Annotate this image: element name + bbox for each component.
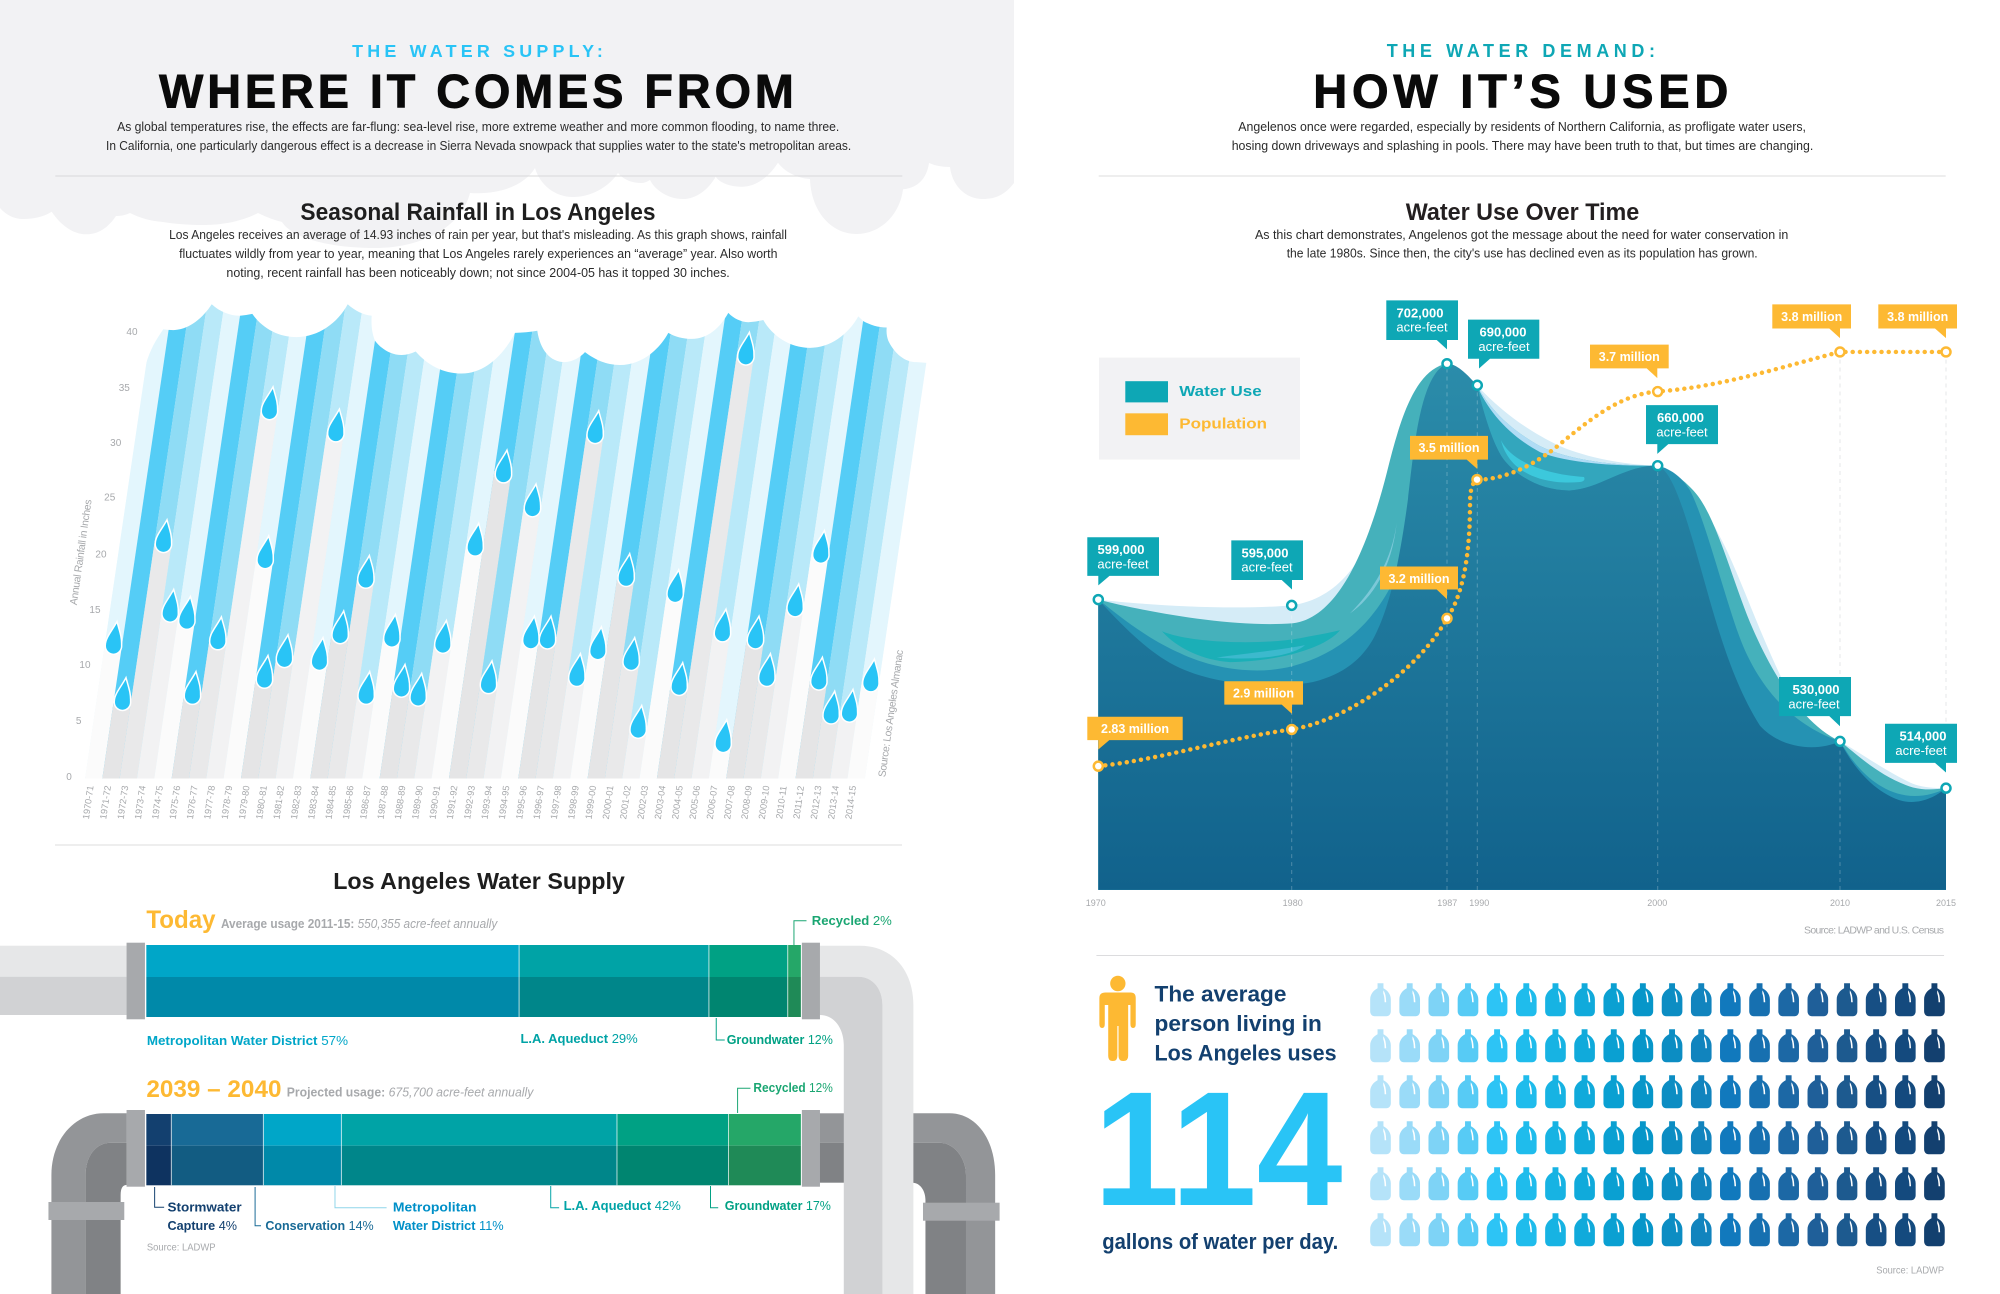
rainfall x axis year labels: 2006-07 xyxy=(705,785,720,820)
callout: 3.7 million: 3.7 million xyxy=(1599,350,1660,364)
callout: 702,000 acre-feet xyxy=(1386,300,1458,349)
chart x axis years: 1987 xyxy=(1437,898,1457,908)
rainfall x axis year labels: 1989-90 xyxy=(410,785,425,820)
callout: 2.9 million xyxy=(1224,681,1303,714)
pipes: dark gray projected pipe xyxy=(48,1113,1000,1294)
projected label: stormwater capture xyxy=(155,1187,242,1233)
supply intro paragraph xyxy=(106,119,851,153)
rainfall y axis values: 10 xyxy=(79,660,91,671)
projected label: aqueduct: L.A. Aqueduct 42% xyxy=(564,1199,681,1213)
callout: 599,000 acre-feet xyxy=(1087,537,1159,585)
legend panel: Population xyxy=(1179,417,1267,433)
chart x axis years: 2000 xyxy=(1647,898,1667,908)
rainfall x axis year labels: 2010-11 xyxy=(774,785,789,820)
callout: 690,000 acre-feet: acre-feet xyxy=(1478,339,1530,354)
rainfall x axis year labels: 1980-81 xyxy=(254,785,269,820)
demand intro paragraph: Angelenos once were regarded, especially by residents of Northern California, as profligate water users, xyxy=(1238,119,1806,134)
rainfall x axis year labels: 1992-93 xyxy=(462,785,477,820)
callout: 3.8 million 2015: 3.8 million xyxy=(1887,310,1948,324)
projected label: metropolitan water district xyxy=(335,1186,504,1233)
callout: 3.7 million xyxy=(1590,345,1669,378)
rainfall x axis year labels: 1995-96 xyxy=(514,785,529,820)
rainfall x axis year labels: 2005-06 xyxy=(688,785,702,820)
callout: 595,000 acre-feet xyxy=(1231,540,1303,589)
rainfall x axis year labels: 1996-97 xyxy=(532,785,546,820)
rainfall description xyxy=(169,227,787,280)
water use description: the late 1980s. Since then, the city's use has declined even as its population has grown. xyxy=(1287,246,1758,261)
callout: 660,000 acre-feet: acre-feet xyxy=(1656,424,1708,439)
projected label: groundwater xyxy=(711,1186,831,1213)
rainfall x axis year labels: 2014-15 xyxy=(843,785,858,820)
chart x axis years: 1990 xyxy=(1469,898,1489,908)
rainfall x axis year labels: 2007-08 xyxy=(722,785,737,820)
projected label: conservation: Conservation 14% xyxy=(265,1219,374,1233)
rain drop markers xyxy=(105,332,879,753)
gallons source: Source: LADWP xyxy=(1876,1265,1944,1277)
callout: 530,000 acre-feet: 530,000 xyxy=(1793,682,1839,697)
rainfall x axis year labels: 1990-91 xyxy=(428,785,442,820)
rainfall y axis title: Annual Rainfall in Inches xyxy=(69,499,95,606)
demand intro paragraph xyxy=(1232,119,1813,153)
rainfall x axis year labels: 2008-09 xyxy=(739,785,754,820)
projected label: aqueduct xyxy=(551,1186,681,1213)
callout: 2.9 million: 2.9 million xyxy=(1233,687,1294,701)
water use heading: Water Use Over Time xyxy=(1406,199,1639,226)
rainfall x axis year labels: 1983-84 xyxy=(306,785,321,820)
rainfall y axis values: 15 xyxy=(89,605,101,616)
population dotted line xyxy=(1098,352,1946,766)
rainfall y axis values: 40 xyxy=(126,327,138,338)
chart x axis years: 2015 xyxy=(1936,898,1956,908)
per-person text intro: Los Angeles uses xyxy=(1155,1041,1337,1066)
projected label: groundwater: Groundwater 17% xyxy=(725,1199,831,1213)
rainfall x axis year labels: 1970-71 xyxy=(81,785,96,820)
rainfall x axis year labels: 1998-99 xyxy=(566,785,581,820)
callout: 690,000 acre-feet: 690,000 xyxy=(1480,325,1526,340)
per-person text intro: person living in xyxy=(1155,1011,1322,1036)
projected label: stormwater capture: Stormwater xyxy=(167,1201,242,1215)
water use markers xyxy=(1094,359,1950,793)
callout: 3.2 million: 3.2 million xyxy=(1388,572,1450,586)
rainfall x axis year labels: 2003-04 xyxy=(653,785,668,820)
rainfall x axis year labels: 1978-79 xyxy=(220,785,234,820)
chart x axis years: 2010 xyxy=(1830,898,1850,908)
population markers xyxy=(1094,347,1950,771)
rainfall y axis values: 20 xyxy=(95,550,107,561)
today label: metropolitan water district: Metropolitan Water District 57% xyxy=(147,1034,348,1048)
rainfall x axis year labels: 2002-03 xyxy=(636,785,650,820)
callout: 595,000 acre-feet: acre-feet xyxy=(1241,560,1293,575)
callout: 3.5 million: 3.5 million xyxy=(1418,441,1480,455)
rainfall x axis year labels: 2009-10 xyxy=(757,785,772,820)
icon: person xyxy=(1099,976,1136,1061)
rainfall y axis values xyxy=(66,327,138,783)
rainfall x axis year labels: 1972-73 xyxy=(116,785,130,820)
rainfall x axis year labels xyxy=(81,785,858,820)
callout: 530,000 acre-feet: acre-feet xyxy=(1788,696,1840,711)
per-person usage panel xyxy=(1094,955,1945,1277)
demand eyebrow heading: THE WATER DEMAND: xyxy=(1387,41,1655,61)
rainfall x axis year labels: 1994-95 xyxy=(497,785,512,820)
rainfall y axis values: 25 xyxy=(104,492,116,503)
rainfall x axis year labels: 1975-76 xyxy=(168,785,182,820)
per-person text intro: The average xyxy=(1155,982,1286,1007)
rainfall bar chart xyxy=(85,304,926,778)
background cloud: supply header xyxy=(0,0,1014,248)
rainfall x axis year labels: 1991-92 xyxy=(445,785,460,820)
water supply panel xyxy=(0,868,1000,1294)
rainfall x axis year labels: 1984-85 xyxy=(324,785,338,820)
gallon jugs pictogram xyxy=(1370,983,1945,1246)
rainfall x axis year labels: 1974-75 xyxy=(150,785,165,820)
supply eyebrow heading: THE WATER SUPPLY: xyxy=(352,41,603,61)
callout: 530,000 acre-feet xyxy=(1779,677,1851,726)
rainfall x axis year labels: 1981-82 xyxy=(272,785,286,820)
legend panel: Water Use xyxy=(1179,384,1262,400)
rainfall y axis values: 0 xyxy=(66,772,72,783)
callout: 2.83 million: 2.83 million xyxy=(1101,722,1169,736)
rainfall description: noting, recent rainfall has been noticeably down; not since 2004-05 has it topped 30 inches. xyxy=(226,265,730,280)
callout: 514,000 acre-feet xyxy=(1885,724,1957,773)
rainfall description: Los Angeles receives an average of 14.93 inches of rain per year, but that's misleading. As this graph shows, rainfall xyxy=(169,227,787,242)
water use area chart xyxy=(1098,364,1946,890)
callout: 660,000 acre-feet: 660,000 xyxy=(1657,410,1704,425)
projected label: stormwater capture: Capture 4% xyxy=(167,1219,237,1233)
projected stacked bar xyxy=(146,1114,801,1185)
chart x axis years xyxy=(1086,898,1956,908)
rainfall x axis year labels: 1985-86 xyxy=(341,785,356,820)
callout: 514,000 acre-feet: 514,000 xyxy=(1900,729,1946,744)
callout: 599,000 acre-feet: acre-feet xyxy=(1097,557,1149,572)
rainfall x axis year labels: 1979-80 xyxy=(237,785,252,820)
rainfall x axis year labels: 1986-87 xyxy=(358,785,373,820)
water use description xyxy=(1255,227,1788,261)
callout: 3.5 million xyxy=(1410,436,1488,469)
today stacked bar xyxy=(146,945,801,1017)
rainfall y axis values: 35 xyxy=(119,383,130,394)
rainfall x axis year labels: 1973-74 xyxy=(133,785,148,820)
chart year guide lines xyxy=(1292,352,1946,890)
projected flanges xyxy=(127,1110,820,1187)
legend panel xyxy=(1099,358,1300,460)
rainfall x axis year labels: 2013-14 xyxy=(826,785,841,820)
callout: 3.8 million 2010: 3.8 million xyxy=(1781,310,1842,324)
rainfall x axis year labels: 1977-78 xyxy=(202,785,217,820)
water supply source: Source: LADWP xyxy=(147,1243,216,1254)
today heading: Today xyxy=(146,907,216,934)
rainfall x axis year labels: 1997-98 xyxy=(549,785,564,820)
rainfall x axis year labels: 1987-88 xyxy=(376,785,390,820)
pipes: light gray current pipe xyxy=(0,946,913,1294)
rainfall x axis year labels: 1988-89 xyxy=(393,785,408,820)
rainfall y axis values: 5 xyxy=(76,716,82,727)
projected label: recycled xyxy=(738,1081,833,1113)
rainfall x axis year labels: 2012-13 xyxy=(809,785,824,820)
today label: groundwater xyxy=(716,1018,833,1047)
callout: 3.2 million xyxy=(1380,567,1458,599)
callout: 514,000 acre-feet: acre-feet xyxy=(1895,743,1947,758)
water use description: As this chart demonstrates, Angelenos got the message about the need for water conservation in xyxy=(1255,227,1788,242)
supply intro paragraph: As global temperatures rise, the effects are far-flung: sea-level rise, more extreme weather and more common flooding, to name three. xyxy=(117,119,839,134)
callout: 690,000 acre-feet xyxy=(1468,320,1539,369)
supply intro paragraph: In California, one particularly dangerous effect is a decrease in Sierra Nevada snowpack that supplies water to the state's metropolitan areas. xyxy=(106,138,851,153)
callout: 702,000 acre-feet: acre-feet xyxy=(1396,320,1448,335)
callout: 2.83 million xyxy=(1087,717,1183,749)
rainfall source note: Source: Los Angeles Almanac xyxy=(877,649,906,778)
chart x axis years: 1970 xyxy=(1086,898,1106,908)
projected label: recycled: Recycled 12% xyxy=(753,1081,833,1095)
water use chart panel xyxy=(1086,300,1957,937)
rainfall x axis year labels: 1971-72 xyxy=(98,785,113,820)
callout: 702,000 acre-feet: 702,000 xyxy=(1397,305,1443,320)
rainfall x axis year labels: 1976-77 xyxy=(185,785,200,820)
rainfall chart panel xyxy=(66,304,926,820)
rainfall heading: Seasonal Rainfall in Los Angeles xyxy=(300,199,656,226)
rainfall x axis year labels: 1982-83 xyxy=(289,785,304,820)
projected label: metropolitan water district: Water District 11% xyxy=(393,1219,504,1233)
today label: aqueduct: L.A. Aqueduct 29% xyxy=(520,1032,638,1046)
demand main title: HOW IT’S USED xyxy=(1313,64,1728,118)
rainfall x axis year labels: 2011-12 xyxy=(792,785,806,820)
rainfall x axis year labels: 2001-02 xyxy=(618,785,633,820)
projected usage note: Projected usage: 675,700 acre-feet annually xyxy=(287,1086,534,1100)
per-person text outro: gallons of water per day. xyxy=(1102,1229,1338,1254)
callout: 599,000 acre-feet: 599,000 xyxy=(1098,542,1144,557)
rainfall x axis year labels: 2004-05 xyxy=(670,785,685,820)
today label: recycled xyxy=(794,914,892,945)
rainfall y axis values: 30 xyxy=(110,438,122,449)
rainfall description: fluctuates wildly from year to year, meaning that Los Angeles rarely experiences an “average” year. Also worth xyxy=(179,246,777,261)
big number 114: 114 xyxy=(1094,1059,1343,1240)
projected heading: 2039 – 2040 xyxy=(146,1076,281,1103)
rainfall x axis year labels: 2000-01 xyxy=(601,785,616,820)
water supply heading: Los Angeles Water Supply xyxy=(333,868,625,894)
chart x axis years: 1980 xyxy=(1283,898,1303,908)
demand intro paragraph: hosing down driveways and splashing in pools. There may have been truth to that, but times are changing. xyxy=(1232,138,1813,153)
today usage note: Average usage 2011-15: 550,355 acre-feet annually xyxy=(221,917,498,931)
rainfall x axis year labels: 1993-94 xyxy=(480,785,494,820)
callout: 3.8 million 2015 xyxy=(1878,304,1957,338)
projected label: conservation xyxy=(255,1187,374,1233)
chart source: Source: LADWP and U.S. Census xyxy=(1804,926,1944,937)
callout: 3.8 million 2010 xyxy=(1772,304,1851,338)
callout: 660,000 acre-feet xyxy=(1646,405,1718,454)
supply main title: WHERE IT COMES FROM xyxy=(159,65,794,118)
rainfall x axis year labels: 1999-00 xyxy=(584,785,598,820)
per-person text intro xyxy=(1155,982,1337,1066)
callout: 595,000 acre-feet: 595,000 xyxy=(1242,545,1288,560)
supply header text block xyxy=(55,41,902,280)
today label: groundwater: Groundwater 12% xyxy=(727,1033,833,1047)
today label: recycled: Recycled 2% xyxy=(812,914,892,928)
projected label: metropolitan water district: Metropolitan xyxy=(393,1201,477,1215)
today flanges xyxy=(127,943,820,1019)
